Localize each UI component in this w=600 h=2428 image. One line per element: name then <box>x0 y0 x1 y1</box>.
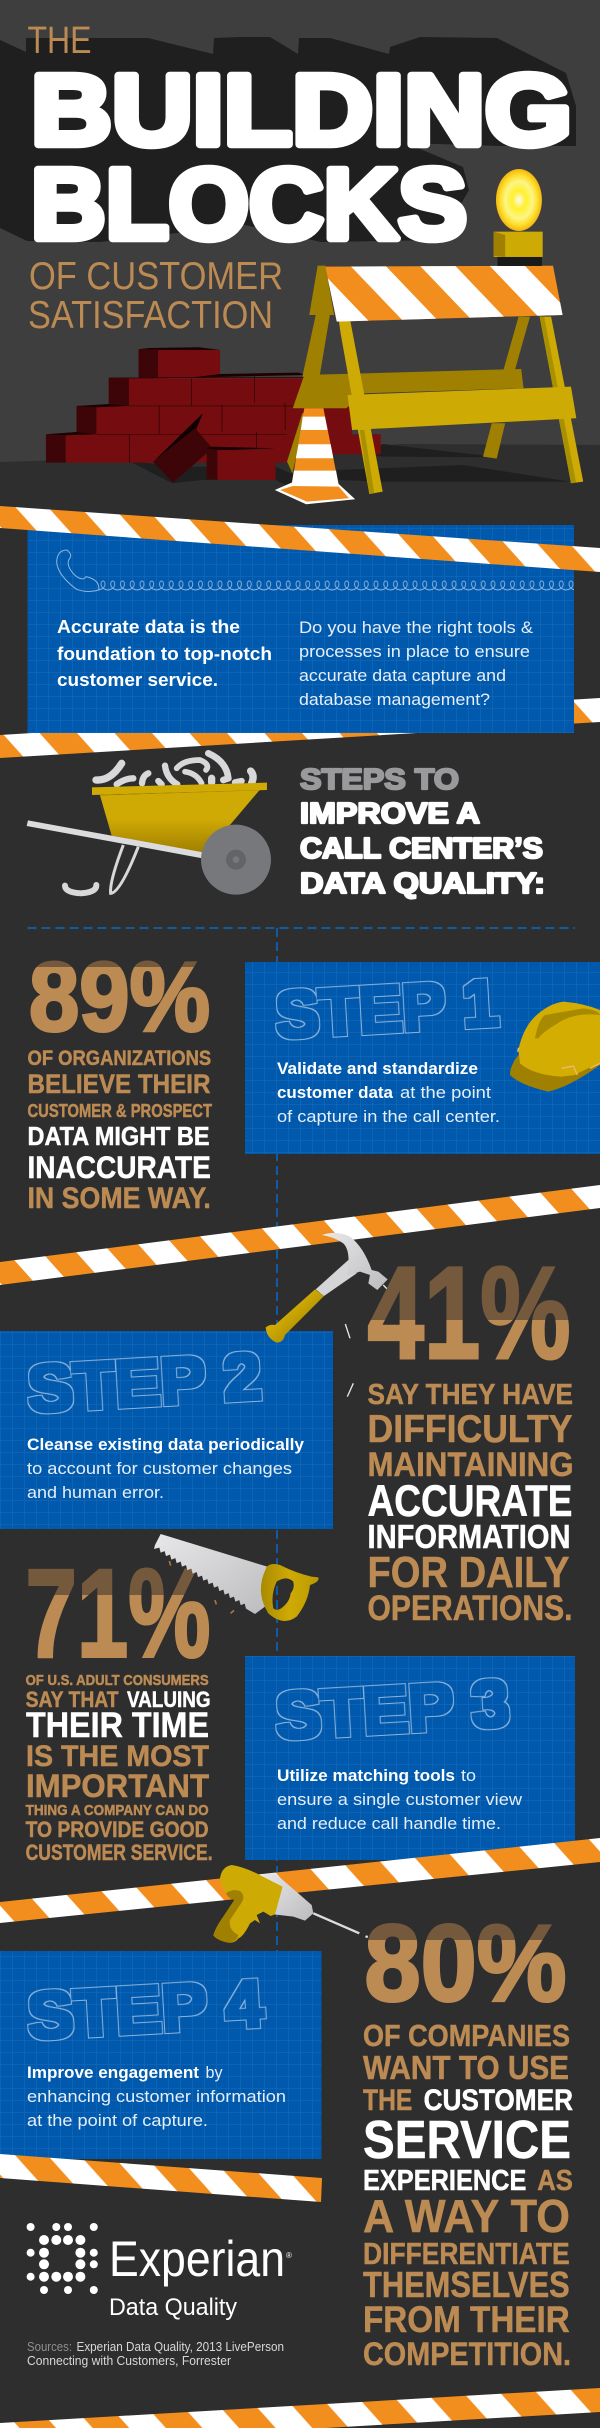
title: SATISFACTION: SATISFACTION <box>28 294 273 337</box>
statement: BELIEVE THEIR <box>28 1069 210 1099</box>
intro lead text <box>57 617 272 690</box>
drill chuck <box>260 1873 313 1921</box>
handle <box>27 820 203 858</box>
hazard tape: under intro box <box>0 698 600 758</box>
logo dot mark <box>27 2223 98 2294</box>
dashed connector: vertical <box>276 928 278 1952</box>
step 4 text: Improve engagement <box>27 2064 200 2082</box>
panel: step 3 <box>245 1656 575 1860</box>
sawdust <box>169 1561 234 1613</box>
icon: telephone handset with coil cord <box>57 550 574 592</box>
hammer grip <box>266 1289 324 1343</box>
statement: OF U.S. ADULT CONSUMERS <box>26 1673 209 1689</box>
step 1 text: Validate and standardize <box>277 1060 478 1078</box>
header scene background <box>0 0 600 520</box>
intro question text <box>299 618 534 709</box>
statement: IMPORTANT <box>26 1768 209 1804</box>
title: THE: THE <box>28 20 92 62</box>
drill bit tip <box>365 1935 368 1938</box>
hammer head <box>322 1233 388 1290</box>
drill body <box>213 1865 283 1943</box>
step 1 text: of capture in the call center. <box>277 1108 500 1126</box>
step 2 text <box>27 1436 305 1502</box>
step 3 text <box>277 1767 522 1833</box>
leg <box>111 845 138 893</box>
heading: steps to improve data quality: IMPROVE A <box>300 798 480 830</box>
illustration: hammer and nails <box>266 1233 392 1397</box>
title: BUILDING: BUILDING <box>31 54 572 166</box>
drill grip shade <box>213 1890 243 1943</box>
title: OF CUSTOMER: OF CUSTOMER <box>29 255 283 298</box>
intro lead text: customer service. <box>57 670 218 690</box>
statement <box>26 1673 213 1865</box>
number 80%: 80% <box>364 1902 566 2024</box>
panel: step 2 <box>0 1331 333 1529</box>
statement: TO PROVIDE GOOD <box>26 1817 209 1842</box>
statement: DIFFICULTY <box>368 1408 572 1451</box>
step 3 text: to <box>461 1767 476 1785</box>
wheel <box>201 825 271 895</box>
statement: A WAY TO <box>363 2190 570 2242</box>
step 4 text: by <box>206 2064 223 2082</box>
stat: 80% <box>363 1902 573 2372</box>
title: BLOCKS: BLOCKS <box>31 148 467 260</box>
hazard tape: under step 4 <box>0 2154 322 2202</box>
heading: steps to improve data quality: DATA QUALITY: <box>300 868 545 900</box>
striped sign <box>325 266 562 322</box>
intro question text: accurate data capture and <box>299 666 506 685</box>
saw handle <box>261 1564 319 1621</box>
statement: EXPERIENCE <box>363 2165 526 2197</box>
statement: SAY THEY HAVE <box>368 1379 573 1411</box>
statement: CUSTOMER SERVICE. <box>26 1840 213 1865</box>
panel: step 1 <box>245 962 600 1154</box>
step 3 text: ensure a single customer view <box>277 1791 522 1809</box>
step 3 text: and reduce call handle time. <box>277 1815 501 1833</box>
statement: SERVICE <box>363 2110 571 2170</box>
heading: steps to improve data quality: CALL CENTER’S <box>300 833 543 865</box>
statement: MAINTAINING <box>368 1446 574 1484</box>
step 1 text <box>277 1060 500 1126</box>
statement <box>28 1047 212 1215</box>
title <box>28 20 572 337</box>
stat: 71% <box>26 1544 213 1865</box>
step 2 text: to account for customer changes <box>27 1460 292 1478</box>
step 2 text: and human error. <box>27 1484 164 1502</box>
statement: INACCURATE <box>28 1149 211 1185</box>
brick wall <box>46 347 381 483</box>
statement: DATA MIGHT BE <box>28 1123 210 1151</box>
logo descriptor: Data Quality <box>109 2294 237 2321</box>
sources: Connecting with Customers, Forrester <box>27 2353 232 2368</box>
step 4 outline heading: STEP 4 <box>26 1965 266 2053</box>
tray rim shadow line <box>100 790 260 795</box>
statement: FROM THEIR <box>363 2298 570 2340</box>
back legs <box>302 266 334 377</box>
sources <box>27 2339 284 2368</box>
ground shadows <box>130 444 570 497</box>
hazard tape: step 1 to step 2 <box>0 1185 600 1285</box>
hazard tape: over intro box <box>0 506 600 572</box>
stat: 41% <box>368 1239 574 1628</box>
statement: THEIR TIME <box>26 1706 209 1745</box>
step 4 text <box>27 2064 286 2130</box>
statement: SAY THAT <box>26 1687 119 1712</box>
statement: CUSTOMER & PROSPECT <box>28 1101 212 1121</box>
step 1 text: at the point <box>400 1084 491 1102</box>
statement <box>363 2019 573 2372</box>
icon: wheelbarrow full of phone handsets <box>27 753 271 895</box>
front legs <box>339 320 383 494</box>
statement: COMPETITION. <box>363 2336 571 2372</box>
statement: THEMSELVES <box>363 2265 570 2305</box>
statement: THING A COMPANY CAN DO <box>26 1802 209 1819</box>
icon: hard hat <box>510 1002 600 1092</box>
sources: Experian Data Quality, 2013 LivePerson <box>76 2339 284 2354</box>
tray body <box>100 790 259 852</box>
statement: WANT TO USE <box>363 2049 569 2086</box>
statement: THE <box>363 2084 412 2117</box>
number 71%: 71% <box>26 1544 210 1684</box>
back crossbar <box>293 369 524 408</box>
dropped handset <box>65 885 96 893</box>
barricade <box>281 169 583 494</box>
dashed divider: horizontal <box>28 927 575 929</box>
statement: VALUING <box>127 1687 210 1712</box>
logo: Experian Data Quality <box>27 2223 292 2321</box>
illustration: power drill <box>213 1865 368 1943</box>
statement: IN SOME WAY. <box>28 1182 211 1215</box>
warning lamp <box>494 169 543 266</box>
stat: 89% <box>28 942 212 1215</box>
registered mark: ® <box>286 2251 292 2260</box>
hazard tape: page bottom <box>0 2388 600 2428</box>
statement <box>368 1379 574 1628</box>
front crossbar <box>347 387 576 430</box>
traffic cone <box>275 408 355 504</box>
step 4 text: enhancing customer information <box>27 2088 286 2106</box>
statement: CUSTOMER <box>424 2084 573 2117</box>
intro question text: database management? <box>299 690 490 709</box>
handset pile <box>96 753 253 784</box>
number 89%: 89% <box>29 942 210 1052</box>
step 4 text: at the point of capture. <box>27 2112 208 2130</box>
intro lead text: foundation to top-notch <box>57 644 272 664</box>
step 3 text: Utilize matching tools <box>277 1767 455 1785</box>
intro question text: Do you have the right tools & <box>299 618 534 637</box>
step 2 text: Cleanse existing data periodically <box>27 1436 305 1454</box>
statement: AS <box>537 2165 573 2197</box>
heading: steps to improve data quality <box>300 764 545 900</box>
sources: Sources: <box>27 2339 72 2354</box>
tray rim <box>92 783 267 795</box>
saw blade <box>154 1534 267 1614</box>
drill bit <box>313 1913 359 1933</box>
intro lead text: Accurate data is the <box>57 617 240 637</box>
logo wordmark: Experian <box>109 2231 285 2287</box>
construction scene illustration <box>46 169 583 504</box>
panel: intro <box>28 525 574 733</box>
intro question text: processes in place to ensure <box>299 642 530 661</box>
heading: steps to improve data quality: STEPS TO <box>300 764 459 796</box>
statement: DIFFERENTIATE <box>363 2236 570 2271</box>
statement: FOR DAILY <box>368 1549 570 1597</box>
step 1 text: customer data <box>277 1084 394 1102</box>
hazard tape: step 3 to step 4 <box>0 1838 600 1923</box>
step 2 outline heading: STEP 2 <box>26 1339 263 1426</box>
statement: OF ORGANIZATIONS <box>28 1047 211 1070</box>
step 1 outline heading: STEP 1 <box>274 965 500 1052</box>
panel: step 4 <box>0 1951 322 2159</box>
illustration: hand saw <box>154 1534 319 1621</box>
statement: OF COMPANIES <box>363 2019 570 2053</box>
step 3 outline heading: STEP 3 <box>274 1666 511 1753</box>
hammer shaft <box>316 1260 357 1296</box>
statement: INFORMATION <box>368 1518 570 1555</box>
statement: IS THE MOST <box>26 1740 209 1773</box>
nails <box>345 1285 392 1397</box>
